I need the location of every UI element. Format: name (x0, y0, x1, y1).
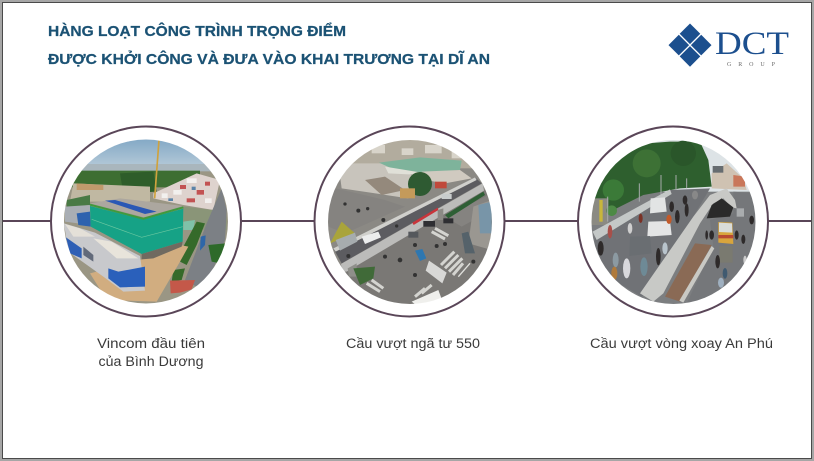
lower road right (733, 192, 737, 193)
trees (180, 222, 205, 265)
green building (90, 206, 183, 254)
logo: DCT Group: GROUP (727, 62, 776, 68)
panel: overpass 550 (314, 126, 504, 316)
sky and distant buildings (653, 138, 757, 192)
photo: overpass at 550 intersection (325, 138, 495, 307)
photo ring 2 (314, 126, 504, 316)
road (185, 188, 227, 287)
logo: DCT Group: DCT (715, 26, 789, 62)
motorbikes and riders (598, 191, 754, 288)
photo: An Phu roundabout overpass (590, 138, 757, 305)
lamp posts (608, 175, 687, 222)
road left (328, 187, 405, 233)
motorbikes (343, 202, 475, 277)
deck (333, 177, 482, 263)
zebra crossing (367, 228, 463, 297)
trees (595, 142, 712, 208)
caption: Vincom (97, 336, 205, 369)
under (342, 190, 495, 307)
panel: An Phu overpass (578, 126, 768, 316)
dirt (90, 245, 188, 302)
title (48, 22, 490, 68)
caption: Vincom: Vincom đầu tiên (97, 336, 205, 351)
title: HÀNG LOẠT CÔNG TRÌNH TRỌNG ĐIỂM (48, 22, 346, 40)
caption: overpass 550: Cầu vượt ngã tư 550 (346, 336, 480, 351)
banner (412, 208, 438, 225)
logo: DCT Group (668, 24, 789, 68)
photo ring 1 (51, 126, 241, 316)
panel: Vincom (51, 126, 241, 316)
townhouses (64, 223, 145, 292)
icon: logo diamond (668, 24, 712, 67)
crane (155, 140, 159, 198)
photo: Vincom construction aerial view (60, 137, 233, 307)
vehicles (336, 233, 357, 251)
cars (650, 197, 667, 213)
right railing of the arch (640, 188, 737, 302)
main deck (593, 188, 710, 297)
photo ring 3 (578, 126, 768, 316)
left railing (593, 189, 672, 240)
timeline connector (3, 220, 811, 222)
bus (718, 222, 733, 244)
caption: An Phu overpass: Cầu vượt vòng xoay An Phú (590, 336, 773, 351)
city (352, 140, 472, 168)
caption: Vincom: của Bình Dương (98, 354, 204, 369)
title: ĐƯỢC KHỞI CÔNG VÀ ĐƯA VÀO KHAI TRƯƠNG TẠI DĨ AN (48, 50, 490, 68)
